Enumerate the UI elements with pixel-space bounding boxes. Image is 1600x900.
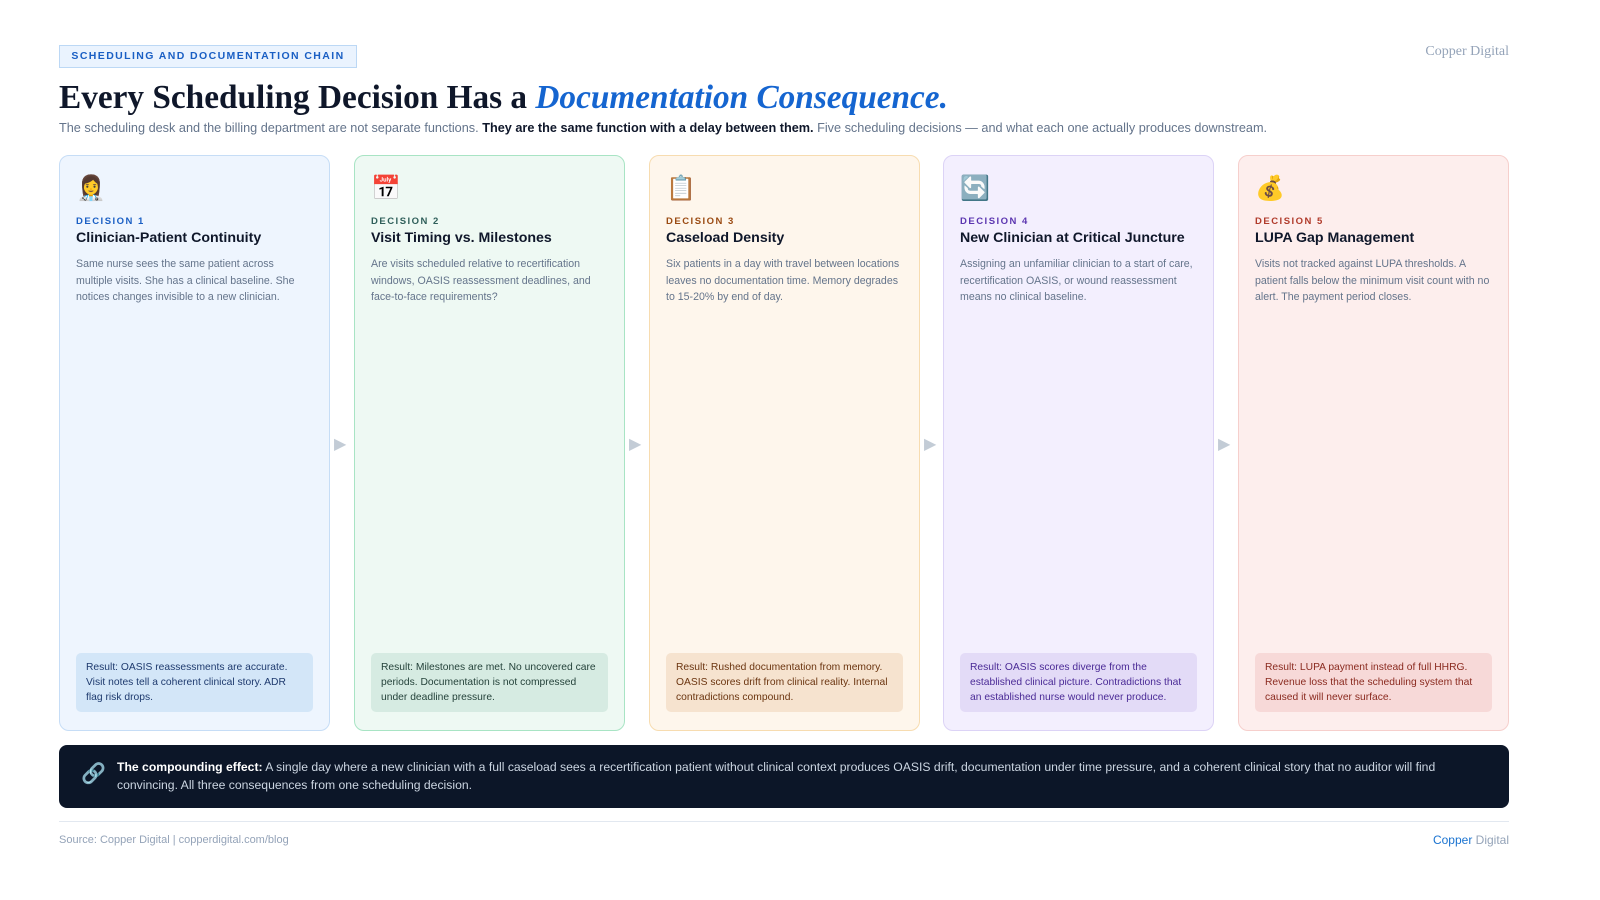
result: Result: Milestones are met. No uncovered care periods. Documentation is not compressed under deadline pressure. <box>381 662 596 703</box>
text: Same nurse sees the same patient across multiple visits. She has a clinical baseline. She notices changes invisible to a new clinician. <box>76 258 294 303</box>
icon: link: 🔗 <box>81 763 106 785</box>
text: Visits not tracked against LUPA thresholds. A patient falls below the minimum visit count with no alert. The payment period closes. <box>1255 258 1489 303</box>
text: Are visits scheduled relative to recertification windows, OASIS reassessment deadlines, and face-to-face requirements? <box>371 258 591 303</box>
heading: Clinician-Patient Continuity <box>76 230 261 246</box>
label: DECISION 3 <box>666 216 735 227</box>
arrow: ▶ <box>924 436 936 453</box>
panel: decision 2 <box>354 155 625 731</box>
label: DECISION 4 <box>960 216 1029 227</box>
result <box>76 653 313 712</box>
heading: LUPA Gap Management <box>1255 230 1414 246</box>
callout: compounding effect: The compounding effect: A single day where a new clinician with a full caseload sees a recertification patient without clinical context produces OASIS drift, documentation under time pressure, and a coherent clinical story that no auditor will find convincing. All three consequences from one scheduling decision. <box>117 760 1435 792</box>
result: Result: Rushed documentation from memory. OASIS scores drift from clinical reality. Internal contradictions compound. <box>676 662 888 703</box>
icon: money bag: 💰 <box>1255 175 1285 202</box>
result: Result: OASIS reassessments are accurate. Visit notes tell a coherent clinical story. ADR flag risk drops. <box>86 662 287 703</box>
label: DECISION 1 <box>76 216 145 227</box>
tag: SCHEDULING AND DOCUMENTATION CHAIN <box>71 50 345 62</box>
result <box>1255 653 1492 712</box>
callout: compounding effect <box>59 745 1509 808</box>
arrow: ▶ <box>334 436 346 453</box>
heading: Caseload Density <box>666 230 784 246</box>
source: Source: Copper Digital | copperdigital.com/blog <box>59 834 289 846</box>
footer brand: Copper Digital <box>1433 833 1509 847</box>
subtitle: The scheduling desk and the billing department are not separate functions. They are the same function with a delay between them. Five scheduling decisions — and what each one actually produces downstream. <box>59 121 1267 135</box>
text: Six patients in a day with travel between locations leaves no documentation time. Memory degrades to 15-20% by end of day. <box>666 258 899 303</box>
panel: decision 4 <box>943 155 1214 731</box>
arrow: ▶ <box>629 436 641 453</box>
panel: decision 3 <box>649 155 920 731</box>
label: DECISION 2 <box>371 216 440 227</box>
result: Result: OASIS scores diverge from the established clinical picture. Contradictions that an established nurse would never produce. <box>970 662 1181 703</box>
heading: Visit Timing vs. Milestones <box>371 230 552 246</box>
icon: nurse: 👩‍⚕️ <box>76 175 106 202</box>
panel: decision 1 <box>59 155 330 731</box>
result: Result: LUPA payment instead of full HHRG. Revenue loss that the scheduling system that caused it will never surface. <box>1265 662 1472 703</box>
result <box>371 653 608 712</box>
result <box>666 653 903 712</box>
brand: Copper Digital <box>1425 44 1509 59</box>
icon: calendar: 📅 <box>371 175 401 202</box>
title: Every Scheduling Decision Has a Documentation Consequence. <box>59 79 948 116</box>
label: DECISION 5 <box>1255 216 1324 227</box>
icon: clipboard: 📋 <box>666 175 696 202</box>
icon: swap: 🔄 <box>960 175 990 202</box>
heading: New Clinician at Critical Juncture <box>960 230 1185 246</box>
panel: decision 5 <box>1238 155 1509 731</box>
result <box>960 653 1197 712</box>
text: Assigning an unfamiliar clinician to a start of care, recertification OASIS, or wound reassessment means no clinical baseline. <box>960 258 1193 303</box>
arrow: ▶ <box>1218 436 1230 453</box>
tag <box>59 45 357 68</box>
